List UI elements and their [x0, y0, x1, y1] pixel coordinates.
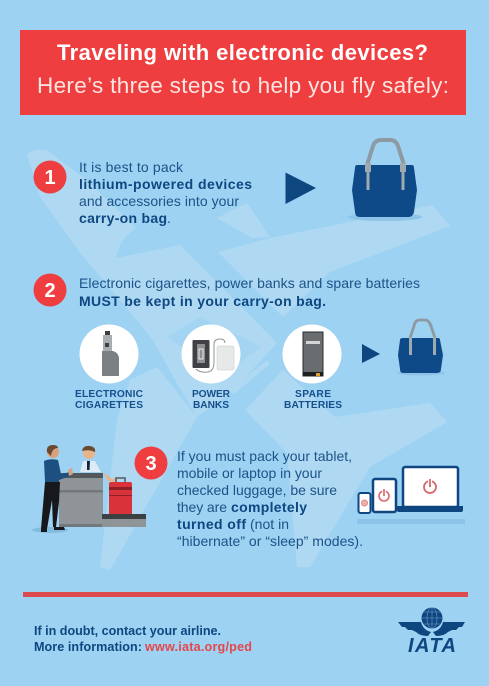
step 3 number badge: 3	[145, 453, 157, 475]
step 3 text: If you must pack your tablet,	[177, 448, 352, 464]
device labels: ELECTRONIC	[75, 389, 144, 400]
step 3 text: (not in	[250, 516, 289, 532]
title banner: Here’s three steps to help you fly safely:	[37, 73, 449, 98]
icon: spare battery	[282, 324, 342, 384]
device labels	[75, 389, 342, 411]
title banner: Traveling with electronic devices?	[57, 40, 428, 65]
background airplane silhouette	[27, 150, 450, 570]
step 3 text	[177, 448, 363, 549]
step 1 text: lithium-powered devices	[79, 176, 252, 192]
step 2 text: MUST be kept in your carry-on bag.	[79, 293, 326, 309]
icon: electronic cigarette	[80, 324, 138, 384]
step 1 text	[79, 159, 252, 226]
agent	[80, 446, 101, 472]
step 2 text	[79, 275, 420, 309]
IATA logo	[398, 608, 465, 657]
footer contact text: If in doubt, contact your airline.	[34, 624, 221, 638]
step 1 text: It is best to pack	[79, 159, 184, 175]
device labels: BATTERIES	[284, 400, 342, 411]
icon: switched-off devices	[357, 467, 465, 524]
illustration: check-in counter with passenger and agent	[32, 445, 146, 533]
step 3 number badge	[134, 446, 168, 480]
step 3 text: checked luggage, be sure	[177, 482, 337, 498]
step 2 text: Electronic cigarettes, power banks and spare batteries	[79, 275, 420, 291]
icon: power bank	[182, 324, 240, 384]
step 3 text: mobile or laptop in your	[177, 465, 322, 481]
step 2 number badge	[34, 274, 66, 306]
device labels: SPARE	[295, 389, 331, 400]
tablet	[373, 479, 396, 512]
arrow: step 1 to bag	[286, 172, 316, 204]
footer contact text: www.iata.org/ped	[144, 640, 252, 654]
device labels: CIGARETTES	[75, 400, 143, 411]
step 1 text: carry-on bag	[79, 210, 167, 226]
step 3 text: they are	[177, 499, 227, 515]
step 3 text: completely	[231, 499, 307, 515]
passenger	[41, 445, 73, 532]
phone	[358, 493, 370, 513]
step 1 text: .	[167, 210, 171, 226]
device labels: BANKS	[193, 400, 229, 411]
arrow: devices to bag	[362, 344, 380, 363]
laptop	[397, 467, 463, 512]
footer contact text: More information:	[34, 640, 142, 654]
counter	[59, 473, 103, 527]
icon: carry-on bag	[348, 140, 422, 221]
footer contact text	[34, 624, 252, 654]
suitcase on belt	[103, 472, 118, 482]
step 3 text: “hibernate” or “sleep” modes).	[177, 533, 363, 549]
IATA logo: IATA	[408, 635, 456, 657]
step 3 text: turned off	[177, 516, 246, 532]
title banner	[20, 30, 466, 115]
step 1 number badge: 1	[44, 167, 56, 189]
step 1 text: and accessories into your	[79, 193, 239, 209]
step 1 number badge	[34, 160, 66, 194]
footer divider	[23, 592, 468, 597]
device labels: POWER	[192, 389, 231, 400]
icon: small carry-on bag	[397, 320, 445, 376]
step 2 number badge: 2	[44, 280, 56, 302]
